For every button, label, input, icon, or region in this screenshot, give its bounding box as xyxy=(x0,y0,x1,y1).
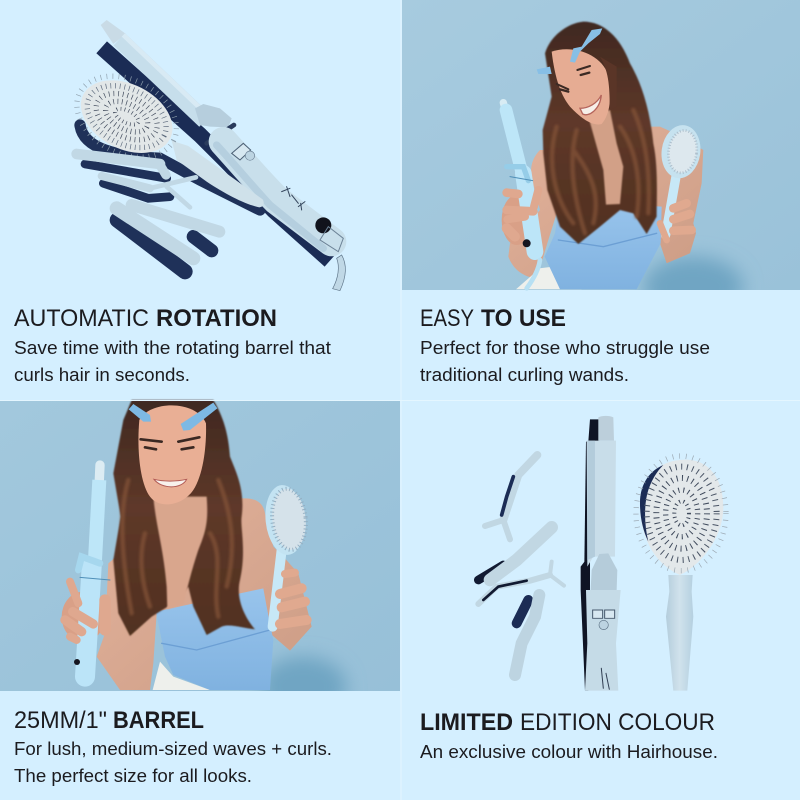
fingers on brush xyxy=(660,203,692,240)
arms and torso xyxy=(508,127,703,279)
hair xyxy=(113,400,255,636)
photo background xyxy=(0,401,400,691)
floor shadow xyxy=(638,249,750,290)
heading xyxy=(14,305,277,332)
description: Perfect for those who struggle use xyxy=(420,338,710,358)
curling wand xyxy=(581,416,621,691)
blue top xyxy=(156,588,273,690)
description xyxy=(14,338,331,385)
hair clips xyxy=(77,154,219,272)
brand script xyxy=(282,187,305,210)
heading: EDITION COLOUR xyxy=(520,709,715,736)
hair clips xyxy=(478,455,564,675)
photo background xyxy=(402,0,800,290)
heading: TO USE xyxy=(481,305,566,332)
description: An exclusive colour with Hairhouse. xyxy=(420,742,718,762)
description: The perfect size for all looks. xyxy=(14,766,252,786)
hair highlights xyxy=(552,110,649,233)
product photo: curling wand, brush and clips xyxy=(63,20,345,291)
hair brush xyxy=(666,177,676,235)
fingers on brush xyxy=(280,573,307,624)
description: For lush, medium-sized waves + curls. xyxy=(14,739,332,759)
face xyxy=(552,49,610,124)
wand held in hand xyxy=(503,103,540,288)
neck and chest xyxy=(588,110,623,205)
photo: woman with wand and brush xyxy=(62,400,347,717)
palm behind wand xyxy=(62,592,105,642)
shorts xyxy=(516,267,582,289)
product photo: wand, brush and clips xyxy=(478,416,726,691)
palm behind wand xyxy=(502,195,532,245)
description xyxy=(14,739,332,786)
panel: limited edition colour xyxy=(420,416,726,762)
hair strand over cheek xyxy=(600,57,617,110)
heading: EASY xyxy=(420,305,474,332)
fingers on wand xyxy=(65,582,105,640)
heading: LIMITED xyxy=(420,709,513,736)
brush shadow xyxy=(80,125,260,210)
hair xyxy=(543,22,657,244)
photo: woman with wand and brush xyxy=(502,22,743,317)
description: traditional curling wands. xyxy=(420,365,629,385)
description xyxy=(420,338,710,385)
hair brush xyxy=(63,60,264,207)
blue top xyxy=(545,203,662,289)
panel: easy to use xyxy=(402,0,800,385)
fingers on wand xyxy=(507,190,538,237)
heading xyxy=(420,305,566,332)
heading: 25MM/1" xyxy=(14,707,107,734)
curling wand xyxy=(101,20,345,291)
heading: AUTOMATIC xyxy=(14,305,149,332)
eyes and brows xyxy=(557,66,590,92)
shorts xyxy=(153,662,210,690)
smile xyxy=(154,479,187,487)
hair brush xyxy=(636,456,726,691)
description: Save time with the rotating barrel that xyxy=(14,338,331,358)
floor shadow xyxy=(254,650,352,691)
wand held in hand xyxy=(78,465,110,677)
description: curls hair in seconds. xyxy=(14,365,190,385)
arms and torso xyxy=(97,498,312,690)
chest and neck over hair xyxy=(153,497,207,609)
panel: automatic rotation xyxy=(14,20,345,385)
display button xyxy=(315,217,331,233)
hair highlights xyxy=(122,480,232,617)
hair clips on head xyxy=(570,28,602,63)
panel: 25mm barrel xyxy=(0,400,400,786)
heading xyxy=(420,709,715,736)
smile xyxy=(580,95,601,115)
cord xyxy=(333,255,345,291)
brows and eyes xyxy=(141,437,199,449)
wand shadow xyxy=(102,47,330,261)
hair brush xyxy=(273,550,282,627)
heading: BARREL xyxy=(113,707,204,734)
heading: ROTATION xyxy=(156,305,277,332)
heading xyxy=(14,707,204,734)
hair clips on head xyxy=(129,404,151,422)
face xyxy=(138,405,206,504)
